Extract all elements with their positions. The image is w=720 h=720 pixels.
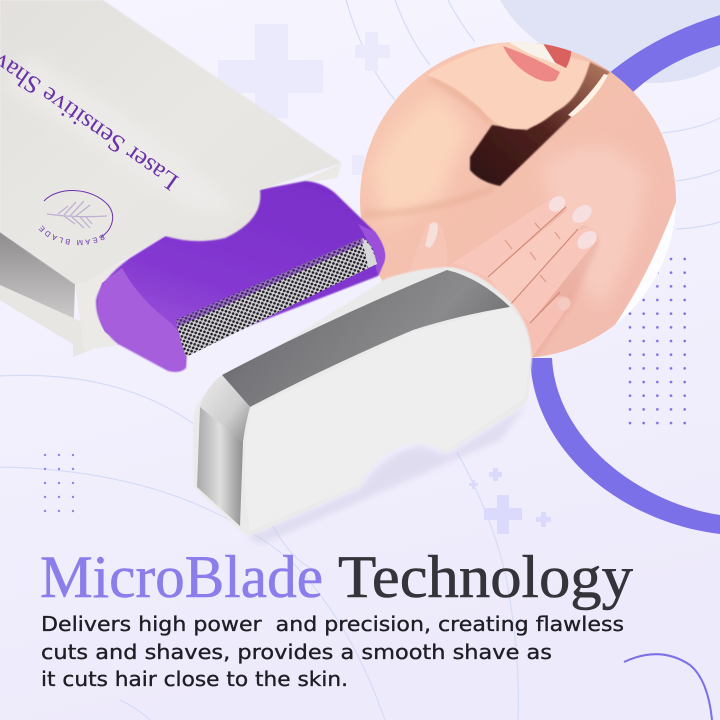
arm highlight bbox=[544, 146, 644, 300]
cover shadow bbox=[247, 405, 527, 545]
top face of the body bbox=[0, 0, 342, 284]
finger two bbox=[488, 210, 583, 303]
dot grid, right bbox=[625, 254, 693, 432]
upper lip bbox=[535, 42, 572, 68]
fingernails bbox=[548, 196, 597, 310]
dot grid, left bbox=[40, 450, 82, 514]
silver end bbox=[200, 375, 250, 442]
plus signs, background bbox=[218, 24, 390, 175]
corner arc, bottom right bbox=[624, 654, 712, 720]
hand bbox=[454, 203, 600, 358]
plus signs, lower right bbox=[469, 468, 551, 534]
decorative pale circle, top right bbox=[500, 0, 720, 83]
mesh silver end bbox=[360, 240, 377, 268]
purple ring arcs bbox=[530, 15, 720, 534]
hand back bbox=[520, 314, 531, 346]
teeth bbox=[508, 42, 556, 64]
purple cap highlight bbox=[98, 268, 186, 371]
mesh purple tint band bbox=[176, 238, 364, 327]
finger gaps bbox=[488, 207, 578, 323]
hand shadow bbox=[533, 209, 600, 358]
purple head bbox=[96, 181, 385, 372]
skin bbox=[355, 40, 690, 370]
body line two: cuts and shaves, provides a smooth shave as bbox=[41, 640, 552, 664]
front plate bbox=[75, 163, 342, 350]
brand logo bbox=[38, 190, 114, 246]
knuckle marks bbox=[505, 223, 560, 282]
thumbnail bbox=[425, 223, 438, 248]
pinky bbox=[530, 296, 570, 358]
shaver device bbox=[0, 0, 386, 373]
finger three bbox=[510, 228, 597, 323]
title bbox=[40, 544, 633, 610]
highlight edge by arm bbox=[568, 74, 608, 117]
title first word: MicroBlade bbox=[40, 544, 323, 610]
logo feather bbox=[47, 201, 107, 228]
silver side bbox=[197, 407, 243, 526]
logo ring bbox=[44, 191, 113, 237]
grey side edge bbox=[0, 232, 75, 344]
blade cover bbox=[193, 267, 532, 545]
top face soft groove bbox=[0, 55, 240, 214]
lower lip bbox=[503, 46, 560, 82]
purple right cap bbox=[358, 224, 385, 276]
metal mesh foil bbox=[176, 238, 377, 357]
product wording: Laser Sensitive Shav bbox=[0, 47, 183, 195]
logo wording: BEAM BLADE bbox=[38, 226, 105, 246]
body text bbox=[41, 612, 624, 691]
neck crease bbox=[430, 78, 492, 122]
dark armpit shadow bbox=[470, 62, 610, 186]
armpit crease bbox=[362, 187, 495, 214]
title second word: Technology bbox=[338, 544, 633, 610]
finger one bbox=[454, 203, 563, 276]
cover face highlight bbox=[245, 307, 530, 531]
chin bbox=[427, 42, 590, 129]
dark blade strip bbox=[222, 270, 510, 407]
body line three: it cuts hair close to the skin. bbox=[41, 667, 348, 691]
photo circle: underarm and hand bbox=[355, 40, 690, 370]
cover white body bbox=[193, 267, 532, 536]
lower lip of the body bbox=[0, 285, 110, 357]
body line one: Delivers high power and precision, creating flawless bbox=[41, 612, 624, 636]
shoulder highlight bbox=[372, 100, 466, 220]
white circle backing bbox=[610, 72, 676, 324]
thumb bbox=[426, 222, 438, 228]
